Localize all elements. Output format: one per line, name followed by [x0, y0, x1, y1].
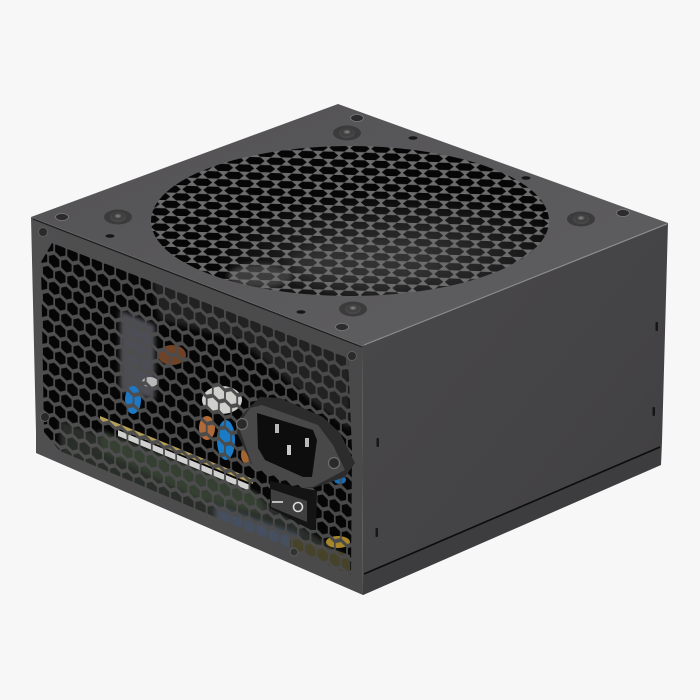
- rear face screws: [38, 228, 356, 556]
- mounting screw large front: [339, 302, 367, 316]
- bracket screw right: [328, 458, 340, 468]
- highlight on front top edge: [364, 224, 667, 345]
- power inlet bracket: [236, 397, 355, 488]
- panel: rear face: [31, 217, 363, 595]
- mounting screw large left: [104, 210, 132, 224]
- fan grille: [151, 146, 549, 296]
- bracket screw left: [236, 418, 248, 430]
- mounting screw large rear: [333, 126, 361, 140]
- small screws and slots on top face: [56, 114, 630, 330]
- illustration: power supply unit: [31, 104, 668, 595]
- mounting screw large right: [567, 212, 595, 226]
- rear ventilation mesh: [41, 243, 352, 575]
- power switch: [270, 481, 317, 530]
- panel: right side face: [362, 223, 668, 595]
- edge between top and rear face: [33, 219, 362, 347]
- inlet socket: [257, 413, 317, 477]
- panel: top face: [31, 104, 668, 346]
